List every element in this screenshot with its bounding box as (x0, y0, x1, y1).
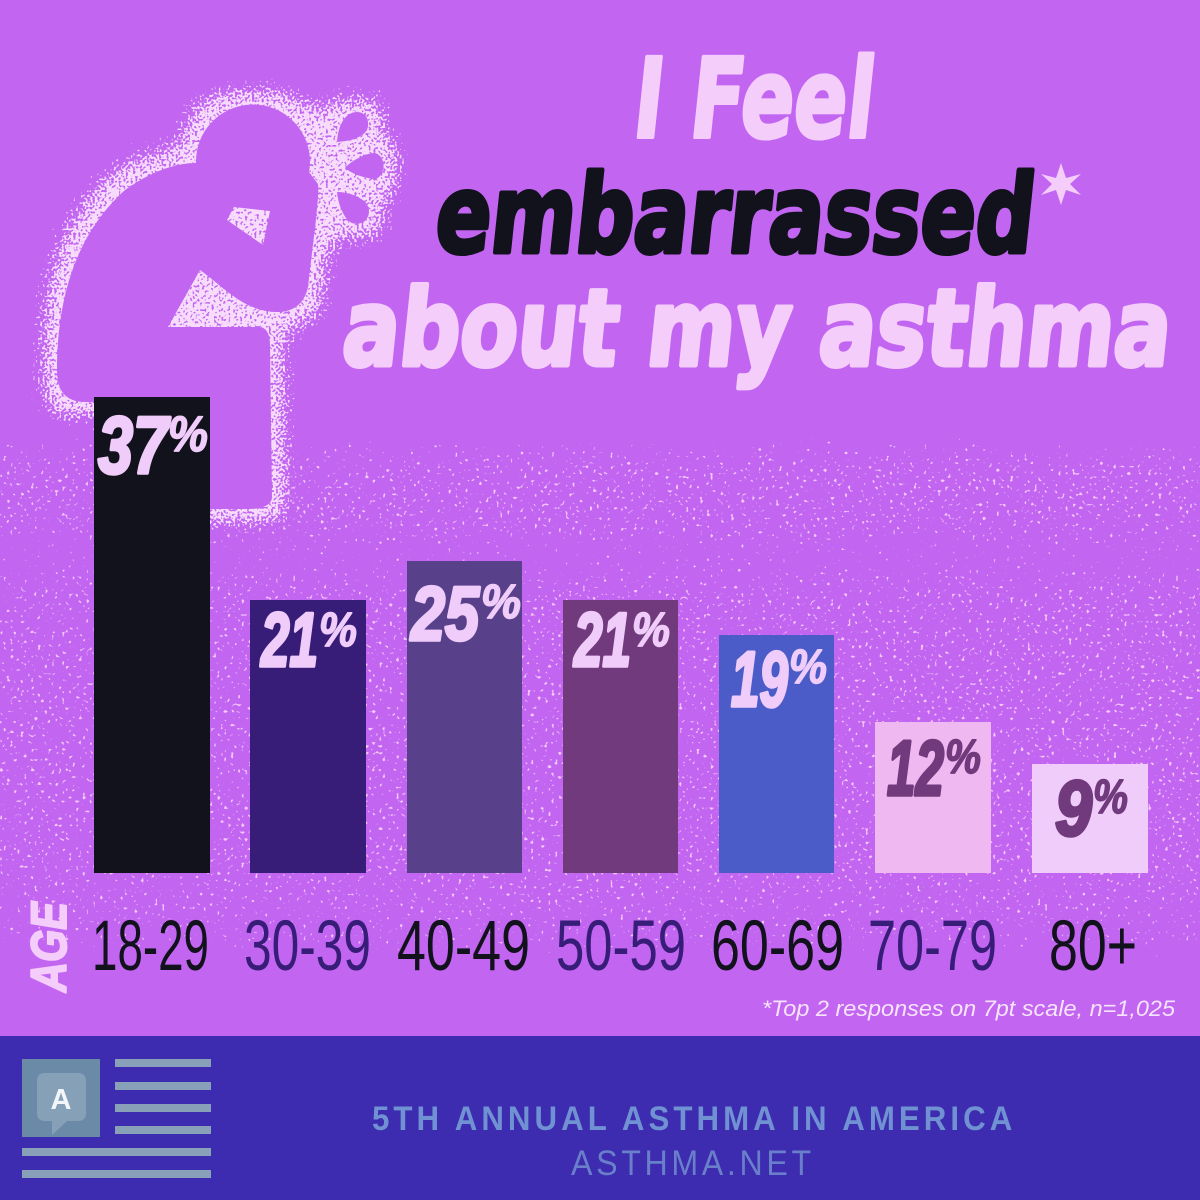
title asterisk (1041, 163, 1081, 205)
bar: 70-79: % (945, 731, 981, 784)
bar: 18-29: % (168, 406, 208, 462)
bar: 30-39: % (319, 604, 357, 657)
footer panel (0, 1036, 1200, 1200)
label 60-69: 60-69 (711, 907, 844, 986)
label 30-39: 30-39 (244, 907, 371, 986)
footnote: *Top 2 responses on 7pt scale, n=1,025 (762, 996, 1176, 1021)
bar: 80+ (1032, 764, 1148, 873)
axis title: AGE: AGE (21, 901, 77, 994)
bar: 50-59: 21 (573, 598, 631, 683)
footer title: 5TH ANNUAL ASTHMA IN AMERICA (372, 1099, 1012, 1137)
age labels (92, 907, 1137, 986)
bar: 30-39 (250, 598, 366, 873)
bar: 80+: % (1093, 771, 1128, 824)
bar: 50-59: % (632, 604, 670, 657)
bar: 60-69: 19 (731, 635, 788, 723)
logo: flag with speech bubble: A (51, 1084, 72, 1116)
label 70-79: 70-79 (868, 907, 997, 986)
bar: 30-39: 21 (260, 598, 318, 683)
bar: 60-69: % (789, 641, 827, 694)
bar: 60-69 (719, 635, 834, 873)
bar: 18-29 (94, 397, 210, 873)
footer url: ASTHMA.NET (571, 1145, 811, 1183)
bar: 40-49: % (481, 576, 521, 629)
bar: 18-29: 37 (98, 401, 171, 491)
bar: 40-49 (407, 561, 522, 873)
label 50-59: 50-59 (556, 907, 686, 986)
logo: flag with speech bubble (22, 1059, 211, 1178)
bar: 70-79: 12 (887, 724, 944, 812)
speckled background band (0, 425, 1200, 975)
icon: embarrassed figure sitting on the top bar, with stress marks (57, 104, 384, 509)
label 80+: 80+ (1049, 907, 1137, 986)
label 40-49: 40-49 (397, 907, 530, 986)
bar: 50-59 (563, 598, 678, 873)
title line: I Feel: I Feel (628, 36, 882, 164)
bar: 80+: 9 (1055, 764, 1093, 852)
bar: 70-79 (875, 722, 991, 873)
bar chart (94, 397, 1148, 873)
label 18-29: 18-29 (92, 907, 209, 986)
title (337, 36, 1178, 391)
bar: 40-49: 25 (409, 572, 480, 657)
